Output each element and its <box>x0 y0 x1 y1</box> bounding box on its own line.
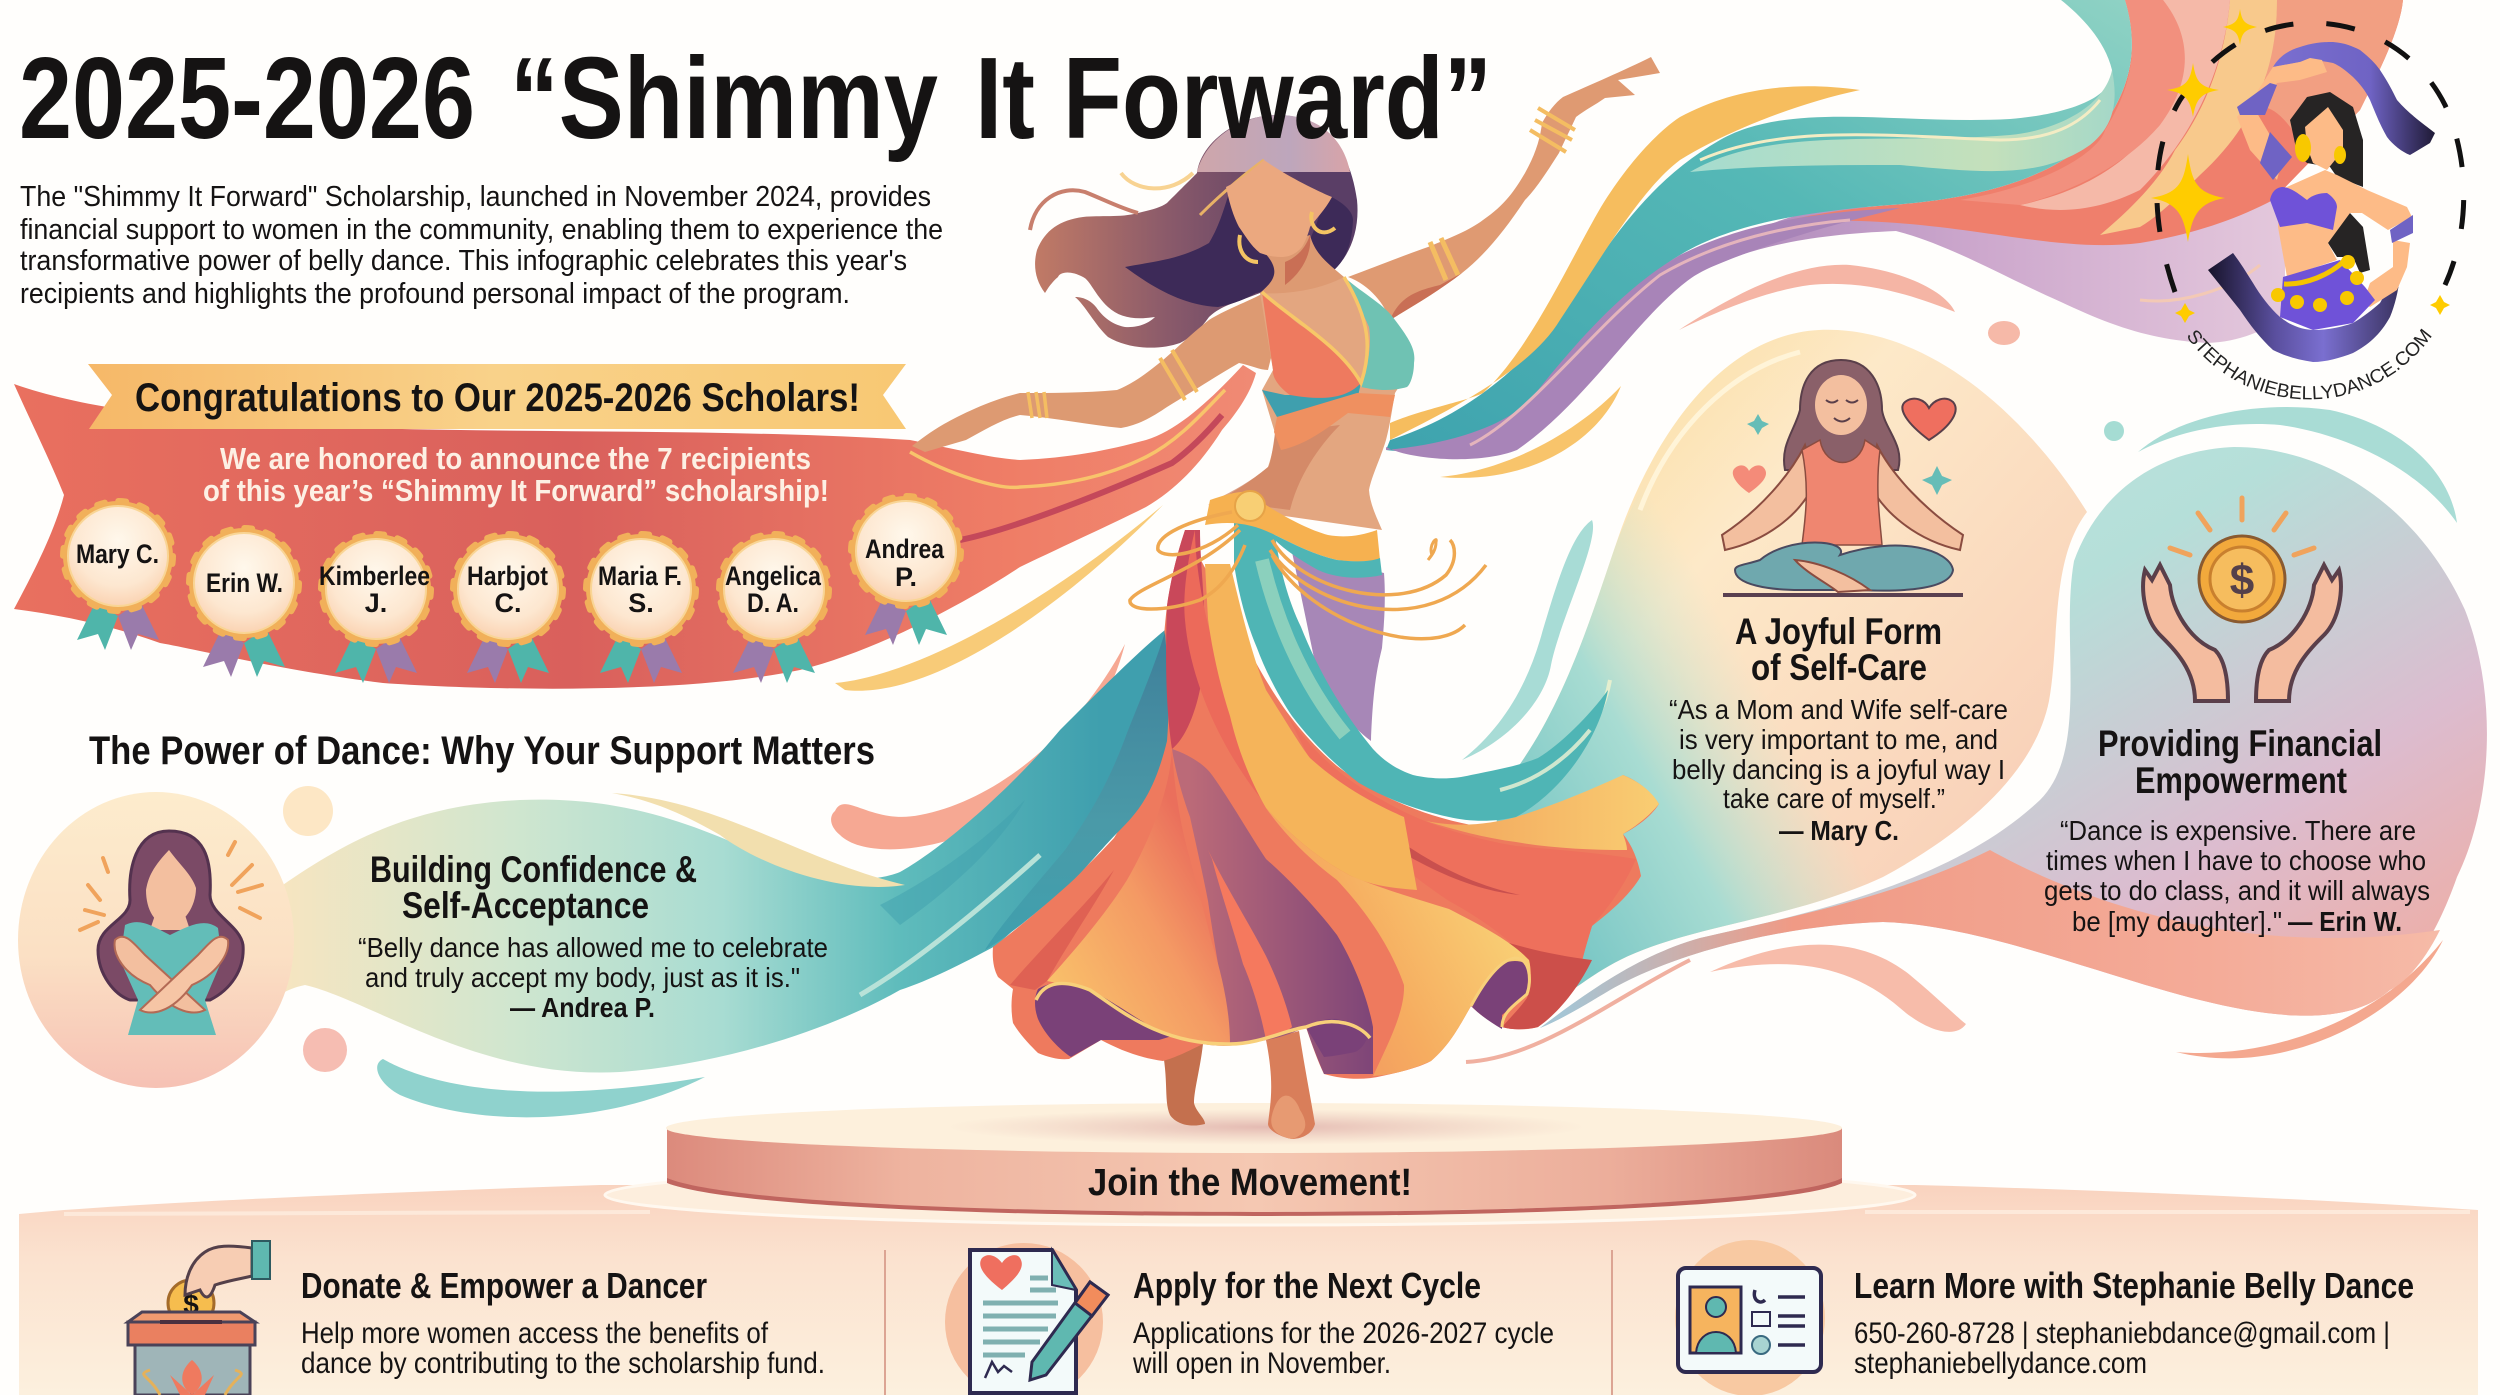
building confidence text: and truly accept my body, just as it is." <box>365 962 800 993</box>
medal: Angelica D. A. <box>719 534 829 683</box>
join the movement label: Join the Movement! <box>1088 1162 1412 1204</box>
intro paragraph: transformative power of belly dance. This infographic celebrates this year's <box>20 245 907 277</box>
action: apply: will open in November. <box>1132 1347 1391 1380</box>
title: “Shimmy <box>510 33 938 163</box>
lavender under skirt <box>1292 552 1385 741</box>
action: learn more <box>1675 1240 2414 1395</box>
raised arm <box>1348 57 1660 320</box>
quote: mary c.: — Mary C. <box>1779 815 1899 846</box>
top right flowing ribbons <box>1386 0 2403 459</box>
bra <box>1262 383 1361 417</box>
building confidence text <box>358 849 828 1023</box>
yellow center panel <box>1205 564 1417 890</box>
action: donate: dance by contributing to the scholarship fund. <box>301 1347 825 1380</box>
quote: erin w. <box>2044 815 2430 937</box>
quote: erin w.: times when I have to choose who <box>2046 845 2426 876</box>
quote: mary c.: take care of myself.” <box>1723 783 1945 814</box>
action: apply: Apply for the Next Cycle <box>1133 1265 1481 1306</box>
scholars announcement <box>203 441 829 508</box>
medal: Harbjot C.: C. <box>494 588 522 618</box>
building confidence text: Self-Acceptance <box>402 885 649 926</box>
building confidence text: Building Confidence & <box>370 849 697 890</box>
face <box>1226 160 1332 257</box>
scarf ribbon behind scholars <box>14 365 1256 689</box>
panel: self-care bubble <box>1480 330 2087 1020</box>
title: 2025-2026 <box>19 33 475 163</box>
medal: Erin W. <box>189 528 299 677</box>
heading: providing financial empowerment: Providing Financial <box>2098 723 2382 764</box>
quote: erin w.: gets to do class, and it will always <box>2044 875 2430 906</box>
logo sparkles <box>2151 9 2450 323</box>
action: apply <box>945 1243 1554 1395</box>
medal: Maria F. S.: S. <box>628 588 654 618</box>
quote: mary c.: is very important to me, and <box>1679 724 1998 755</box>
logo dancer <box>2208 42 2435 362</box>
heading: a joyful form of self-care: A Joyful Form <box>1735 611 1942 652</box>
center mauve panel <box>1172 749 1373 1074</box>
action: donate: Help more women access the benefits of <box>301 1317 769 1350</box>
pedestal <box>605 1103 1915 1225</box>
torso <box>1208 277 1414 530</box>
icon: hands holding coin: $ <box>2230 556 2254 605</box>
neck <box>1260 235 1344 293</box>
quote: erin w.: “Dance is expensive. There are <box>2060 815 2416 846</box>
heading: a joyful form of self-care: of Self-Care <box>1751 647 1927 688</box>
medal: Maria F. S.: Maria F. <box>598 561 682 591</box>
legs <box>1159 1036 1205 1126</box>
medal: Harbjot C.: Harbjot <box>467 561 548 591</box>
scholar medals <box>63 496 961 683</box>
building confidence text: “Belly dance has allowed me to celebrate <box>358 932 828 963</box>
congratulations banner: Congratulations to Our 2025-2026 Scholars! <box>135 376 860 420</box>
icon: person hugging self <box>80 831 262 1035</box>
icon: donation box: $ <box>183 1289 199 1320</box>
action: learn more: 650-260-8728 | stephaniebdance@gmail.com | <box>1854 1317 2390 1350</box>
medal: Andrea P.: P. <box>895 562 917 592</box>
quote: mary c.: belly dancing is a joyful way I <box>1672 754 2005 785</box>
panel: financial empowerment bubble <box>1540 447 2487 1028</box>
dancer figure <box>912 57 1660 1139</box>
right red panel <box>1288 716 1636 1029</box>
belt <box>1205 492 1380 562</box>
medal: Mary C.: Mary C. <box>76 539 159 569</box>
action: donate <box>128 1241 825 1395</box>
panel: building confidence flow <box>18 630 1180 1088</box>
medal: Mary C. <box>63 501 173 650</box>
quote: mary c. <box>1669 694 2008 846</box>
icon: application document <box>945 1243 1108 1395</box>
heading: providing financial empowerment <box>2098 723 2382 801</box>
medal: Kimberlee J.: Kimberlee <box>319 561 430 591</box>
yellow right tip <box>1426 775 1659 850</box>
gold hip chains <box>1130 512 1486 639</box>
medal: Andrea P. <box>851 496 961 645</box>
dividers <box>885 1250 1612 1395</box>
medal: Angelica D. A.: Angelica <box>725 561 822 591</box>
intro paragraph: The "Shimmy It Forward" Scholarship, launched in November 2024, provides <box>20 181 931 213</box>
left orange panel <box>1047 749 1230 1044</box>
intro paragraph: recipients and highlights the profound personal impact of the program. <box>20 278 850 310</box>
quote: mary c.: “As a Mom and Wife self-care <box>1669 694 2008 725</box>
platform base panel <box>19 1185 2478 1395</box>
skirt body <box>993 530 1659 1079</box>
medal: Kimberlee J. <box>319 534 431 683</box>
teal sash <box>1234 522 1608 821</box>
logo badge <box>2151 9 2466 400</box>
logo arc text <box>2186 330 2436 399</box>
extended arm <box>912 293 1273 452</box>
icon: hands holding coin <box>2143 498 2341 701</box>
purple hems <box>1035 983 1172 1057</box>
congratulations banner <box>88 364 906 429</box>
title: It <box>975 33 1035 163</box>
building confidence text: — Andrea P. <box>510 992 655 1023</box>
quote: erin w.: be [my daughter]." <box>2072 906 2282 937</box>
action: apply: Applications for the 2026-2027 cycle <box>1133 1317 1554 1350</box>
back hair <box>1035 115 1358 348</box>
medal: Maria F. S. <box>586 534 696 683</box>
heading: the power of dance: The Power of Dance: Why Your Support Matters <box>89 729 875 773</box>
intro paragraph: financial support to women in the community, enabling them to experience the <box>20 214 943 246</box>
action: donate: Donate & Empower a Dancer <box>301 1265 707 1306</box>
accent wisps <box>283 265 2457 1117</box>
icon: contact card <box>1675 1240 1825 1395</box>
medal: Erin W.: Erin W. <box>206 568 283 598</box>
icon: meditating woman <box>1722 360 1963 595</box>
heading: a joyful form of self-care <box>1735 611 1942 688</box>
medal: Kimberlee J.: J. <box>365 588 387 618</box>
scholars announcement: of this year’s “Shimmy It Forward” scholarship! <box>203 473 829 508</box>
title: Forward” <box>1063 33 1492 163</box>
medal: Andrea P.: Andrea <box>865 534 945 564</box>
quote: erin w.: — Erin W. <box>2288 906 2402 937</box>
scholars announcement: We are honored to announce the 7 recipients <box>220 441 811 476</box>
intro paragraph <box>20 181 943 310</box>
icon: donation box <box>128 1241 270 1395</box>
logo badge: STEPHANIEBELLYDANCE.COM <box>2188 328 2432 400</box>
heading: providing financial empowerment: Empowerment <box>2135 760 2347 801</box>
medal: Harbjot C. <box>453 534 563 683</box>
title <box>19 33 1492 163</box>
medal: Angelica D. A.: D. A. <box>747 588 799 618</box>
action: learn more: stephaniebellydance.com <box>1854 1347 2147 1380</box>
